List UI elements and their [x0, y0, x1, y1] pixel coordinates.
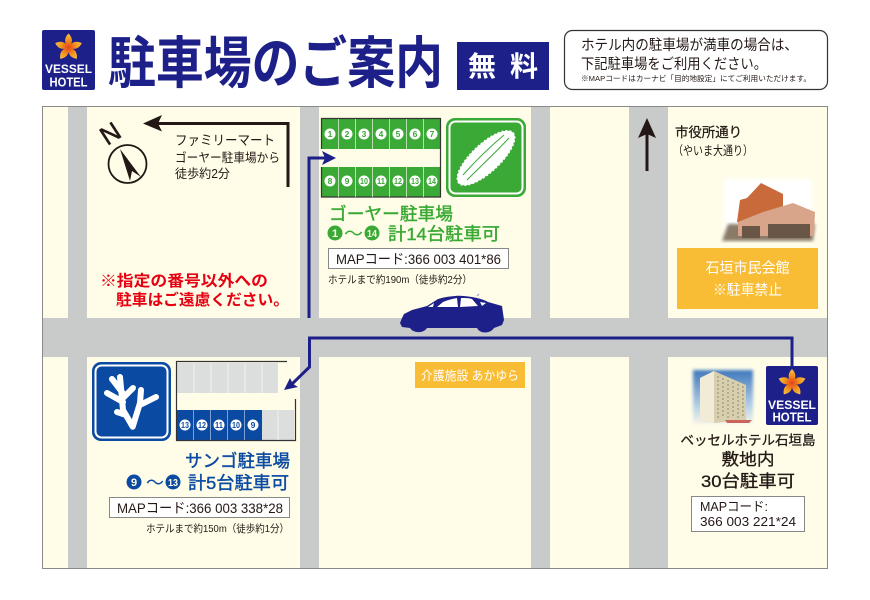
arrow to city hall street [638, 118, 656, 171]
Goya parking lot diagram: 7 [430, 129, 435, 139]
Sango parking text: 9 [131, 477, 137, 489]
Sango parking text: ～ [146, 473, 164, 493]
civic hall no parking label [677, 248, 818, 309]
Sango MAP code: MAPコード:366 003 338*28 [117, 500, 283, 516]
hotel parking text [680, 433, 816, 491]
Goya parking lot diagram: 1 [328, 129, 333, 139]
Sango parking lot diagram: 11 [215, 420, 223, 430]
icon: goya [446, 118, 526, 197]
notice box: ホテル内の駐車場が満車の場合は、 [581, 37, 798, 54]
civic hall no parking label: 石垣市民会館 [706, 260, 790, 277]
photo: civic hall [722, 179, 815, 241]
Sango parking lot diagram: 12 [198, 420, 206, 430]
Goya parking lot diagram: 8 [328, 176, 333, 186]
Sango parking text: 13 [168, 478, 178, 489]
compass north indicator [94, 116, 146, 183]
parking warning [100, 271, 289, 309]
civic hall no parking label: ※駐車禁止 [713, 282, 782, 299]
arrow to FamilyMart [143, 115, 288, 187]
icon: coral [92, 362, 171, 441]
notice box [564, 30, 828, 90]
Goya parking text: 1 [332, 228, 338, 240]
arrow to Goya parking [309, 151, 336, 318]
Goya parking lot diagram: 4 [379, 129, 384, 139]
route from hotel to Sango parking [284, 338, 792, 390]
Goya parking lot diagram: 10 [360, 176, 368, 186]
Goya parking text: ～ [344, 224, 363, 245]
city hall street label [673, 125, 753, 158]
hotel logo on map: VESSEL [768, 398, 816, 412]
hotel parking text: 30台駐車可 [701, 472, 795, 491]
Goya parking lot diagram: 14 [428, 176, 436, 186]
Sango parking lot diagram: 9 [251, 420, 256, 430]
Goya parking lot diagram [321, 118, 441, 197]
care facility label: 介護施設 あかゆら [421, 368, 519, 383]
FamilyMart label: 徒歩約2分 [175, 166, 230, 181]
hotel MAP code [692, 496, 804, 532]
parking warning: 駐車はご遠慮ください。 [116, 290, 289, 309]
parking warning: ※指定の番号以外への [100, 271, 268, 290]
FamilyMart label: ゴーヤー駐車場から [175, 150, 280, 165]
notice box: 下記駐車場をご利用ください。 [581, 56, 767, 73]
Goya parking text: 14 [367, 229, 377, 240]
Goya distance note: ホテルまで約190m（徒歩約2分） [328, 273, 472, 286]
photo: hotel building [693, 370, 753, 424]
Goya parking lot diagram: 12 [394, 176, 402, 186]
Goya parking lot diagram: 5 [396, 129, 401, 139]
Sango distance note: ホテルまで約150m（徒歩約1分） [146, 522, 289, 535]
FamilyMart label [175, 133, 280, 181]
Goya parking lot diagram: 11 [377, 176, 385, 186]
city hall street label: （やいま大通り） [673, 144, 753, 158]
Sango parking lot diagram: 13 [181, 420, 189, 430]
hotel parking text: 敷地内 [722, 450, 774, 469]
notice box: ※MAPコードはカーナビ「目的地設定」にてご利用いただけます。 [581, 73, 811, 83]
hotel logo header [42, 30, 95, 90]
Sango parking lot diagram: 10 [232, 420, 240, 430]
hotel logo header: HOTEL [50, 76, 88, 90]
Goya parking text: ゴーヤー駐車場 [329, 204, 453, 224]
hotel parking text: ベッセルホテル石垣島 [680, 433, 816, 448]
map background with roads [42, 106, 828, 568]
Goya parking text: 計14台駐車可 [388, 224, 500, 244]
Goya parking lot diagram: 6 [413, 129, 418, 139]
hotel logo on map: HOTEL [772, 410, 812, 424]
hotel logo header: VESSEL [45, 64, 92, 76]
Goya parking lot diagram: 9 [345, 176, 350, 186]
free badge [457, 42, 549, 90]
city hall street label: 市役所通り [675, 125, 742, 140]
compass north indicator: N [94, 116, 126, 151]
Sango parking text [126, 451, 290, 493]
Sango parking lot diagram [176, 362, 296, 440]
hotel MAP code: MAPコード: [700, 499, 768, 514]
Goya parking lot diagram: 3 [362, 129, 367, 139]
hotel MAP code: 366 003 221*24 [700, 514, 796, 529]
Sango parking text: サンゴ駐車場 [185, 451, 290, 471]
hotel logo on map [766, 366, 818, 425]
Goya parking lot diagram: 2 [345, 129, 350, 139]
icon: car [400, 294, 504, 332]
FamilyMart label: ファミリーマート [175, 133, 275, 148]
free badge: 無料 [468, 51, 538, 82]
Goya MAP code: MAPコード:366 003 401*86 [336, 251, 501, 267]
Goya parking text [328, 204, 500, 245]
title: 駐車場のご案内 [108, 32, 443, 95]
Sango parking text: 計5台駐車可 [188, 473, 289, 493]
Goya parking lot diagram: 13 [411, 176, 419, 186]
care facility label [415, 362, 525, 388]
